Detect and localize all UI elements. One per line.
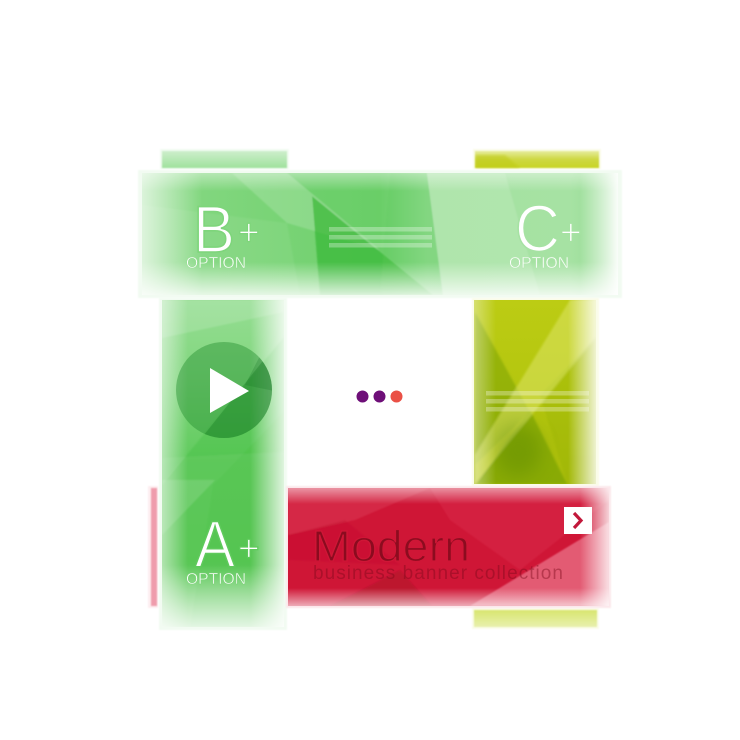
dots bbox=[356, 390, 402, 402]
text lines: yellow column bbox=[486, 391, 589, 412]
label: B+: B bbox=[193, 192, 235, 266]
plus: A: + bbox=[238, 528, 260, 569]
label: C+: C bbox=[515, 191, 560, 265]
label: OPTION C: OPTION bbox=[509, 255, 569, 272]
panel: yellow column bbox=[472, 298, 599, 486]
label: OPTION B: OPTION bbox=[186, 255, 246, 272]
label: A+: A bbox=[195, 507, 235, 581]
icon: arrow button bbox=[564, 507, 592, 534]
infographic canvas bbox=[138, 149, 622, 630]
label: OPTION A: OPTION bbox=[186, 571, 246, 588]
panel: top green banner bbox=[138, 170, 622, 298]
panel: red banner bbox=[286, 486, 611, 608]
icon: play button bbox=[176, 342, 272, 438]
plus: B: + bbox=[238, 212, 260, 253]
plus: C: + bbox=[560, 212, 582, 253]
text lines: top banner bbox=[329, 227, 432, 248]
top yellow stub bbox=[473, 149, 601, 169]
red left stub bbox=[148, 486, 158, 608]
bottom yellow stub bbox=[472, 608, 599, 629]
heading: Modern: Modern bbox=[312, 522, 470, 571]
panel: left green column bbox=[159, 298, 287, 630]
top green stub bbox=[160, 149, 289, 169]
subheading: business banner collection bbox=[313, 563, 563, 584]
